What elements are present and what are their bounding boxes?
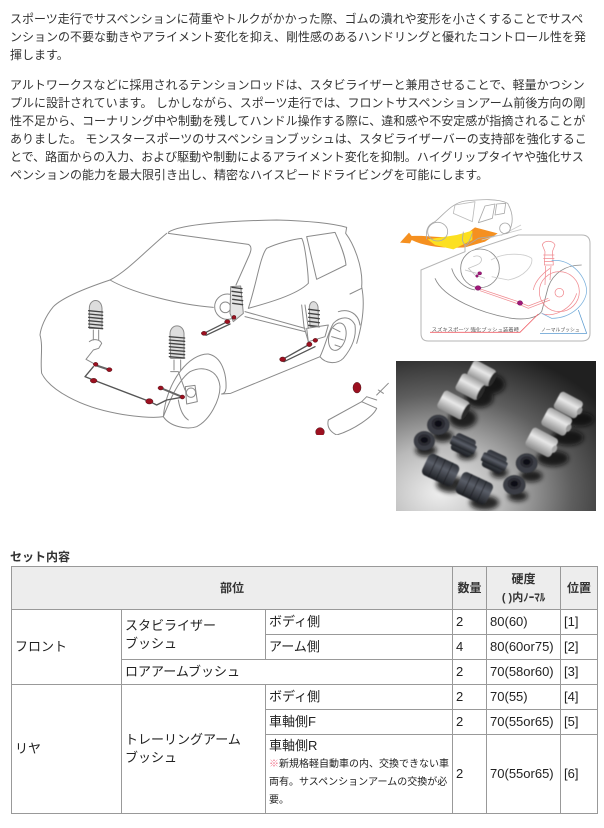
set contents table: 70(55or65) <box>490 766 554 781</box>
set contents table: リヤ <box>15 741 41 756</box>
set contents table: 2 <box>456 614 463 629</box>
set contents table: ※新規格軽自動車の内、交換できない車 <box>269 759 449 770</box>
set contents table: [2] <box>564 639 578 654</box>
large ribbed bushes <box>420 452 461 488</box>
orange arrow <box>400 227 498 248</box>
purple bushes <box>475 272 523 305</box>
bush bores <box>421 420 530 487</box>
right diagram: bush comparison <box>400 199 590 342</box>
set contents table: 車軸側F <box>269 714 316 729</box>
second paragraph: プルに設計されています。 しかしながら、スポーツ走行では、フロントサスペンションアーム前後方向の剛 <box>10 96 585 110</box>
set contents table: [1] <box>564 614 578 629</box>
yellow highlight <box>428 231 472 249</box>
set contents table: アーム側 <box>269 639 320 654</box>
black flanged bushes <box>414 415 537 495</box>
set contents table: ボディ側 <box>269 689 320 704</box>
diagram labels: ノーマルブッシュ <box>541 326 580 333</box>
intro paragraph: スポーツ走行でサスペンションに荷重やトルクがかかった際、ゴムの潰れや変形を小さくすることでサスペ <box>10 12 583 26</box>
set contents table: [3] <box>564 664 578 679</box>
set contents table: ブッシュ <box>125 636 177 650</box>
small ribbed bushes <box>447 431 479 459</box>
second paragraph: アルトワークスなどに採用されるテンションロッドは、スタビライザーと兼用させることで、軽量かつシン <box>10 78 585 92</box>
set contents table: ( )内ﾉｰﾏﾙ <box>502 592 545 604</box>
set contents table: 2 <box>456 766 463 781</box>
set contents table: 数量 <box>458 581 482 595</box>
set contents heading: セット内容 <box>10 550 70 564</box>
set contents table: トレーリングアーム <box>125 732 241 747</box>
set contents table: 硬度 <box>512 572 536 586</box>
set contents table: 70(55or65) <box>490 714 554 729</box>
silver bushes left row <box>466 359 499 388</box>
set contents table: フロント <box>15 639 67 654</box>
set contents table: 2 <box>456 689 463 704</box>
front left strut <box>86 300 103 363</box>
blue normal bush lines <box>540 260 587 333</box>
muffler <box>328 402 377 435</box>
second paragraph: ペンションの能力を最大限引き出し、精密なハイスピードドライビングを可能にします。 <box>10 168 488 182</box>
diagram labels: スズキスポーツ 強化ブッシュ装着時 <box>432 326 519 333</box>
set contents table: ブッシュ <box>125 750 177 765</box>
pink strut and stabilizer <box>430 241 579 332</box>
red bushings <box>90 315 361 436</box>
set contents table: 車軸側R <box>269 738 317 753</box>
intro paragraph: ンションの不要な動きやアライメント変化を抑え、剛性感のあるハンドリングと優れたコントロール性を発 <box>10 30 586 44</box>
second paragraph: 性不足から、コーナリング中や制動を残してハンドル操作する際に、違和感や不安定感が指摘されることが <box>10 114 585 128</box>
set contents table: [5] <box>564 714 578 729</box>
set contents table: ボディ側 <box>269 614 320 629</box>
intro paragraph <box>10 12 586 62</box>
rounded callout panel <box>421 235 590 341</box>
intro paragraph: 揮します。 <box>10 48 69 62</box>
set contents table: 4 <box>456 639 463 654</box>
silver bushes right row <box>553 391 586 421</box>
set contents table: 2 <box>456 664 463 679</box>
set contents table: 70(58or60) <box>490 664 554 679</box>
front right strut <box>169 326 185 390</box>
set contents table: スタビライザー <box>125 618 216 632</box>
shadows <box>415 374 594 510</box>
set contents table: 部位 <box>220 581 244 595</box>
stabilizer bar <box>85 367 182 405</box>
rear axle <box>245 312 305 332</box>
car suspension diagram <box>40 220 389 435</box>
set contents table: 要。 <box>269 795 289 806</box>
set contents table <box>11 566 598 814</box>
set contents table: ロアアームブッシュ <box>125 664 240 679</box>
set contents table: [6] <box>564 766 578 781</box>
set contents table: 80(60) <box>490 614 528 629</box>
product photo: bushings <box>396 361 596 511</box>
second paragraph: とで、路面からの入力、および駆動や制動によるアライメント変化を抑制。ハイグリップタイヤや強化サス <box>10 150 584 164</box>
diagram labels <box>432 326 580 333</box>
second paragraph: ありました。 モンスタースポーツのサスペンションブッシュは、スタビライザーバーの支持部を強化するこ <box>10 132 587 146</box>
second paragraph <box>10 78 587 182</box>
set contents table: 80(60or75) <box>490 639 554 654</box>
set contents table: [4] <box>564 689 578 704</box>
set contents table: 70(55) <box>490 689 528 704</box>
set contents table: 2 <box>456 714 463 729</box>
set contents table: 位置 <box>567 581 591 595</box>
set contents table: 両有。サスペンションアームの交換が必 <box>269 777 447 788</box>
